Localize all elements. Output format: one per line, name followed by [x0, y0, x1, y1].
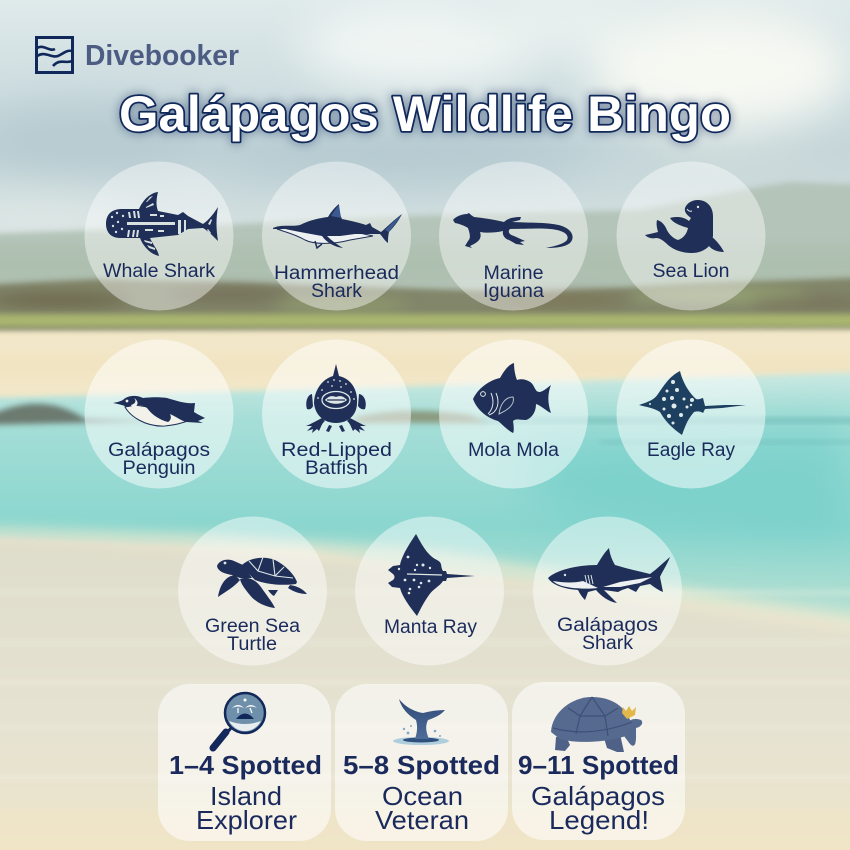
panel: hammerhead shark: [262, 162, 411, 310]
label: Galapagos penguin: Galápagos: [108, 440, 210, 461]
panel: mola mola: [439, 340, 588, 488]
panel: red-lipped batfish: [262, 340, 411, 488]
text: 1-4 spotted: 1–4 Spotted: [169, 750, 322, 780]
card: 5-8 spotted: [335, 684, 508, 841]
text: ocean veteran: Veteran: [375, 805, 469, 835]
text: 9-11 spotted: 9–11 Spotted: [518, 750, 679, 780]
label: green sea turtle: Turtle: [227, 634, 277, 655]
label: red-lipped batfish: Batfish: [305, 458, 368, 479]
text: Galapagos legend: Galápagos: [531, 781, 665, 811]
label: red-lipped batfish: Red-Lipped: [281, 440, 392, 461]
label: marine iguana: Iguana: [483, 281, 544, 302]
label: Galapagos penguin: Penguin: [122, 458, 196, 479]
icon: Galapagos shark: [548, 548, 670, 603]
panel: Galapagos shark: [533, 516, 682, 666]
icon: penguin: [113, 396, 205, 426]
label: Galapagos shark: Shark: [582, 633, 634, 654]
icon: marine iguana: [453, 213, 573, 248]
icon: green sea turtle: [217, 557, 307, 608]
text: 5-8 spotted: 5–8 Spotted: [343, 750, 500, 780]
icon: whale shark: [106, 192, 218, 256]
icon: sea lion: [645, 200, 724, 253]
label: manta ray: Manta Ray: [384, 617, 478, 638]
label: eagle ray: Eagle Ray: [647, 440, 735, 461]
icon: magnifying glass with island: [213, 693, 265, 748]
title: Galápagos Wildlife Bingo: [119, 86, 731, 142]
icon: mola mola: [473, 363, 551, 433]
title: Galápagos Wildlife Bingo: [119, 86, 731, 142]
icon: manta ray: [388, 534, 475, 616]
label: mola mola: Mola Mola: [468, 440, 559, 461]
icon: hammerhead shark: [273, 204, 402, 248]
icon: giant tortoise with crown: [551, 697, 642, 752]
text: Galapagos legend: Legend!: [549, 805, 649, 835]
text: island explorer: Explorer: [196, 805, 297, 835]
panel: Galapagos penguin: [84, 340, 234, 488]
label: green sea turtle: Green Sea: [205, 616, 300, 637]
text: island explorer: Island: [210, 781, 282, 811]
panel: whale shark: [84, 162, 234, 310]
logo wordmark: Divebooker: [85, 40, 239, 72]
card: 1-4 spotted: [158, 684, 331, 841]
label: sea lion: Sea Lion: [652, 261, 730, 282]
logo mark: [36, 38, 72, 72]
logo: Divebooker: [36, 38, 239, 72]
panel: marine iguana: [439, 162, 588, 310]
panel: eagle ray: [616, 340, 766, 488]
label: whale shark: Whale Shark: [103, 261, 216, 282]
icon: batfish: [306, 364, 366, 433]
panel: sea lion: [616, 162, 766, 310]
icon: whale tail: [393, 699, 449, 745]
label: Galapagos shark: Galápagos: [557, 615, 658, 636]
label: hammerhead shark: Shark: [311, 281, 363, 302]
icon: eagle ray: [639, 371, 746, 435]
card: 9-11 spotted: [512, 682, 685, 840]
label: marine iguana: Marine: [484, 263, 544, 284]
text: ocean veteran: Ocean: [382, 781, 463, 811]
panel: green sea turtle: [178, 516, 327, 666]
panel: manta ray: [355, 516, 504, 666]
label: hammerhead shark: Hammerhead: [274, 263, 399, 284]
